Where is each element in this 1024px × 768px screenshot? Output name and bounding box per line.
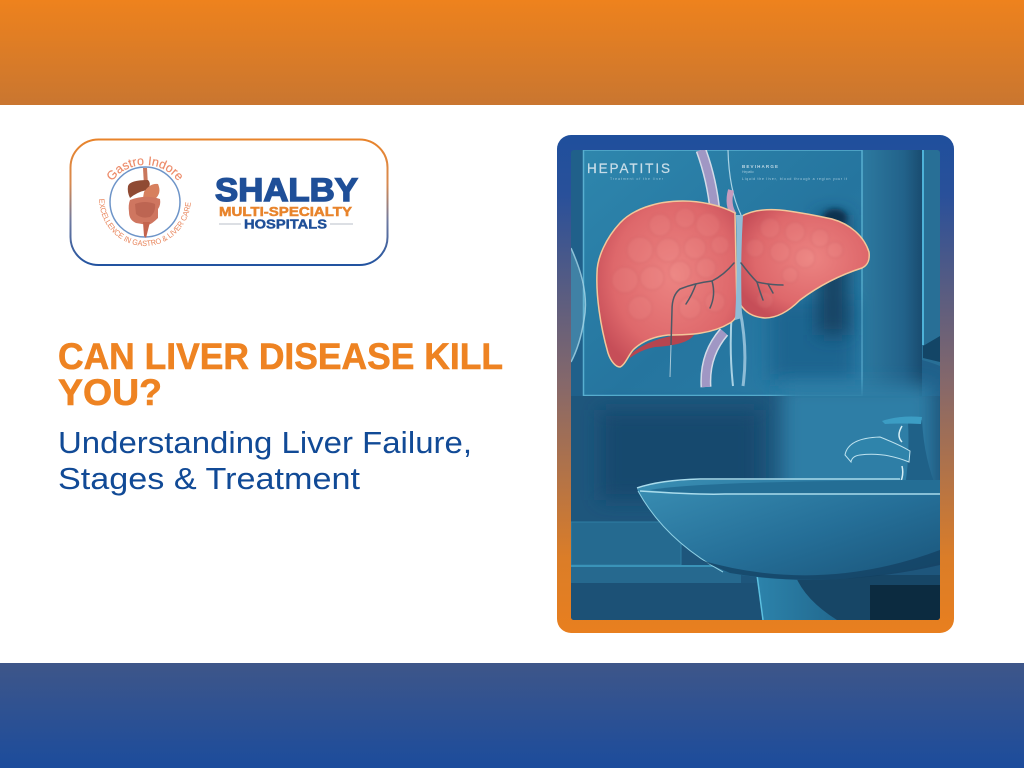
- cabinet right of pedestal: [798, 575, 940, 620]
- wordmark MULTI-SPECIALTY: MULTI-SPECIALTY: [219, 204, 353, 219]
- wall right of poster: [862, 150, 922, 400]
- left edge swoosh: [571, 248, 585, 362]
- logo panel: [70, 138, 388, 266]
- icon: digestive organs: [128, 168, 160, 238]
- branching vessels: [671, 263, 783, 345]
- central ligament: [735, 215, 743, 320]
- left lobe: [597, 201, 737, 367]
- gallbladder: [630, 333, 695, 358]
- lower wall: [571, 396, 940, 620]
- poster side text: Hepatic: [742, 170, 754, 174]
- logo panel border: [70, 140, 388, 265]
- liver: [597, 201, 869, 377]
- logo arc text: Gastro Indore: Gastro Indore: [107, 156, 182, 180]
- right lobe: [740, 210, 869, 318]
- poster side text: [742, 164, 847, 181]
- bottom blue band: [0, 663, 1024, 768]
- subtitle: Stages & Treatment: [58, 461, 360, 496]
- lobule texture: [612, 208, 843, 320]
- poster: [584, 150, 869, 396]
- pedestal: [757, 575, 837, 620]
- wordmark HOSPITALS: HOSPITALS: [244, 218, 327, 232]
- vessels: [701, 150, 745, 387]
- logo: Gastro Indore: [99, 156, 191, 246]
- shelves: [571, 522, 681, 565]
- wordmark SHALBY: SHALBY: [215, 172, 358, 208]
- poster heading: HEPATITIS: [587, 161, 670, 176]
- poster side text: BEVIHARGE: [742, 164, 778, 169]
- right wall panel: [922, 150, 940, 366]
- illustration: hepatitis poster above a sink: [571, 150, 940, 620]
- sink: [637, 479, 940, 580]
- poster side text: Liquid the liver, blood through a region your it: [742, 177, 847, 181]
- image panel: [557, 135, 954, 633]
- top orange band: [0, 0, 1024, 105]
- logo: Shalby: [215, 172, 358, 232]
- title: YOU?: [58, 371, 162, 413]
- faucet: [844, 416, 932, 480]
- logo arc text: tagline: EXCELLENCE IN GASTRO & LIVER CARE: [99, 199, 191, 246]
- poster small text: Treatment of the liver: [610, 177, 664, 181]
- image frame: [557, 135, 954, 633]
- title: CAN LIVER DISEASE KILL: [58, 335, 503, 377]
- subtitle: Understanding Liver Failure,: [58, 425, 472, 460]
